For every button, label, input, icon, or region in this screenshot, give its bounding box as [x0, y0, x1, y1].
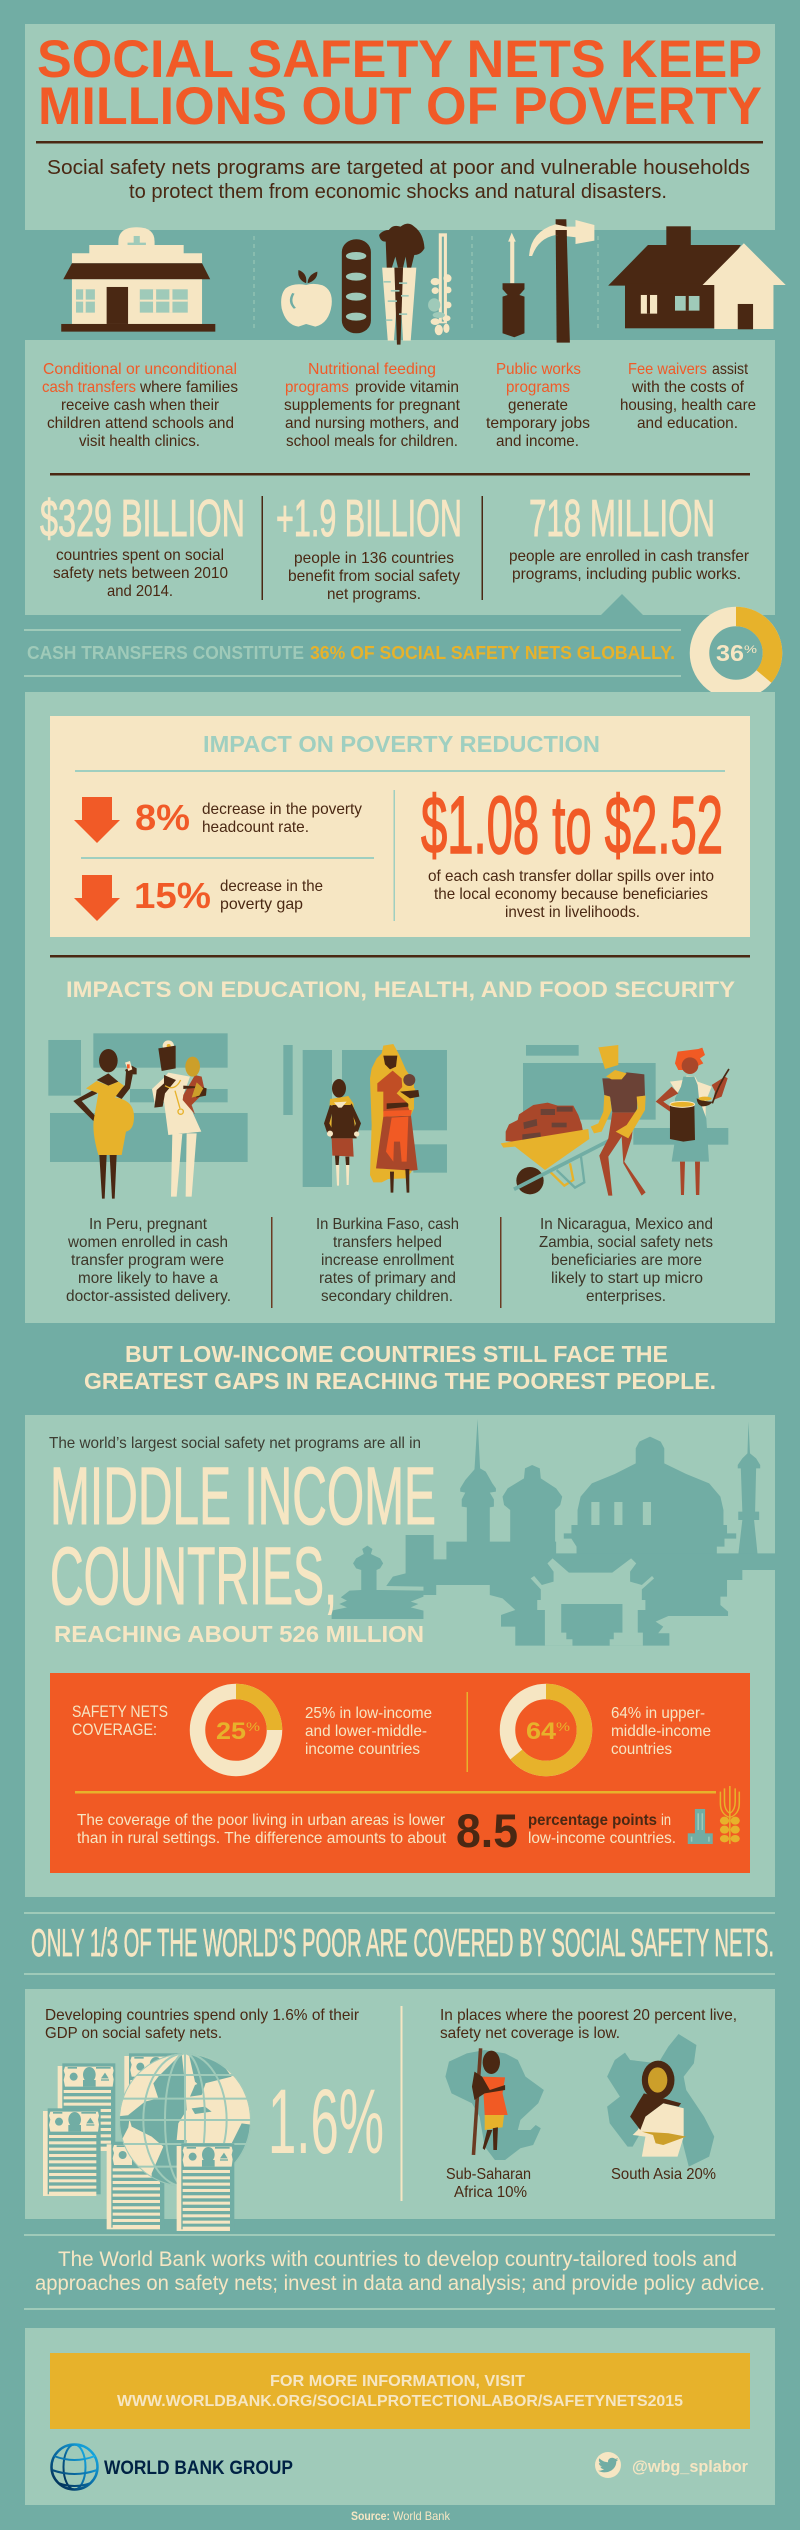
- illustration: burkina faso mother and child: [283, 1044, 447, 1193]
- headline: middle income countries: MIDDLE INCOME: [50, 1451, 436, 1542]
- illustration: wheelbarrow and cook: [501, 1045, 729, 1196]
- label: safety nets coverage: COVERAGE:: [72, 1721, 157, 1739]
- stat: spillover: the local economy because beneficiaries: [434, 886, 708, 903]
- stat: 15%: 15%: [134, 875, 211, 916]
- source: Source:: [351, 2509, 390, 2523]
- heading: greatest gaps: BUT LOW-INCOME COUNTRIES STILL FACE THE: [125, 1341, 668, 1367]
- column: cash transfers: [42, 361, 238, 450]
- caption: peru: transfer program were: [71, 1252, 224, 1269]
- column: public works: Public works: [496, 361, 581, 378]
- stats numbers: [40, 490, 715, 548]
- caption: burkina faso: increase enrollment: [321, 1252, 455, 1269]
- column: nutritional feeding: provide vitamin: [355, 379, 459, 396]
- stats captions: [53, 547, 750, 603]
- caption: nicaragua: Zambia, social safety nets: [539, 1234, 713, 1251]
- title: [37, 30, 762, 136]
- column: fee waivers: [620, 361, 756, 432]
- donut: 36%: 36: [716, 640, 744, 666]
- labels: regions: Africa 10%: [454, 2184, 527, 2201]
- stats captions: and 2014.: [107, 583, 173, 600]
- intro text: to protect them from economic shocks and natural disasters.: [129, 181, 667, 203]
- label: safety nets coverage: SAFETY NETS: [72, 1703, 168, 1721]
- illustration: globe and bills: [43, 2050, 255, 2231]
- text: poorest 20 percent: [440, 2007, 737, 2042]
- caption: peru: doctor-assisted delivery.: [66, 1288, 231, 1305]
- intro text: Social safety nets programs are targeted at poor and vulnerable households: [47, 157, 750, 179]
- column: public works: and income.: [496, 433, 579, 450]
- text: urban rural difference: in: [661, 1812, 671, 1829]
- caption: burkina faso: rates of primary and: [319, 1270, 456, 1287]
- stat: 8%: 8%: [135, 797, 190, 838]
- stats captions: people in 136 countries: [294, 550, 454, 567]
- donut: 25%: %: [246, 1720, 260, 1734]
- caption: nicaragua: [539, 1216, 713, 1305]
- callout: more information: FOR MORE INFORMATION, VISIT: [270, 2373, 525, 2390]
- statement: world bank works: The World Bank works with countries to develop country-tailored tools and: [58, 2248, 737, 2271]
- text: poorest 20 percent: safety net coverage is low.: [440, 2025, 620, 2042]
- text: urban rural difference: The coverage of the poor living in urban areas is lower: [77, 1812, 446, 1829]
- heading: greatest gaps: GREATEST GAPS IN REACHING THE POOREST PEOPLE.: [84, 1368, 716, 1394]
- caption: nicaragua: In Nicaragua, Mexico and: [540, 1216, 713, 1233]
- illustration: south asia map and woman: [607, 2034, 714, 2167]
- skyline silhouette: [332, 1419, 775, 1646]
- caption: peru: [66, 1216, 231, 1305]
- panel: middle income: [25, 1415, 775, 1897]
- column: public works: temporary jobs: [486, 415, 590, 432]
- stats captions: programs, including public works.: [512, 566, 741, 583]
- stat: 15%: decrease in the: [220, 878, 323, 895]
- stat: 15%: poverty gap: [220, 896, 303, 913]
- stats captions: people are enrolled in cash transfer: [509, 548, 750, 565]
- heading: impacts on education: IMPACTS ON EDUCATION, HEALTH, AND FOOD SECURITY: [66, 977, 735, 1002]
- column: nutritional feeding: and nursing mothers, and: [285, 415, 459, 432]
- label: safety nets coverage: [72, 1703, 168, 1739]
- cash transfers statement: CASH TRANSFERS CONSTITUTE: [27, 643, 304, 663]
- illustration: pregnant woman and doctor: [48, 1033, 248, 1199]
- caption: burkina faso: secondary children.: [321, 1288, 453, 1305]
- stats numbers: $329 BILLION: [40, 490, 245, 548]
- column: nutritional feeding: programs: [285, 379, 349, 396]
- text: 64% coverage: 64% in upper-: [611, 1705, 705, 1722]
- source: World Bank: [393, 2509, 451, 2523]
- title: SOCIAL SAFETY NETS KEEP: [37, 30, 762, 89]
- donut: 36%: [700, 616, 772, 690]
- donut: 64%: %: [556, 1720, 570, 1734]
- stat: 1.6%: 1.6%: [268, 2071, 384, 2173]
- caption: peru: In Peru, pregnant: [89, 1216, 208, 1233]
- column: nutritional feeding: Nutritional feeding: [308, 361, 436, 378]
- stats captions: net programs.: [327, 586, 421, 603]
- donut: 36%: %: [744, 644, 757, 656]
- column: cash transfers: cash transfers: [42, 379, 136, 396]
- stats captions: countries spent on social: [56, 547, 224, 564]
- stats numbers: +1.9 BILLION: [276, 490, 462, 548]
- column: nutritional feeding: supplements for pregnant: [284, 397, 461, 414]
- column: cash transfers: Conditional or unconditional: [43, 361, 237, 378]
- panel: poverty reduction box: [50, 716, 750, 937]
- text: 25% coverage: [305, 1705, 432, 1758]
- icon: health clinic: [61, 227, 215, 332]
- text: 64% coverage: countries: [611, 1741, 672, 1758]
- stat: spillover: of each cash transfer dollar spills over into: [428, 868, 714, 885]
- pointer triangle: [600, 594, 644, 616]
- text: 64% coverage: [611, 1705, 711, 1758]
- labels: regions: Sub-Saharan: [446, 2166, 531, 2183]
- donut: 64%: 64: [526, 1718, 557, 1745]
- callout: more information: WWW.WORLDBANK.ORG/SOCIALPROTECTIONLABOR/SAFETYNETS2015: [117, 2393, 683, 2410]
- column: fee waivers: Fee waivers: [628, 361, 707, 378]
- icon: city and wheat: [688, 1786, 740, 1844]
- column: nutritional feeding: [284, 361, 461, 450]
- panel: impact: [25, 692, 775, 1323]
- caption: burkina faso: [316, 1216, 459, 1305]
- caption: nicaragua: beneficiaries are more: [551, 1252, 702, 1269]
- text: spending: [45, 2007, 360, 2042]
- panel: spending: [25, 1989, 775, 2219]
- text: urban rural difference: 8.5: [456, 1804, 518, 1857]
- social: twitter handle: [595, 2452, 748, 2478]
- subhead: reaching 526 million: REACHING ABOUT 526 MILLION: [54, 1621, 424, 1647]
- heading: greatest gaps: [84, 1341, 716, 1394]
- text: urban rural difference: than in rural settings. The difference amounts to about: [77, 1830, 447, 1847]
- column: public works: programs: [506, 379, 570, 396]
- callout: more information: [50, 2353, 750, 2429]
- stat: 8%: decrease in the poverty: [202, 801, 362, 818]
- column: public works: [486, 361, 590, 450]
- caption: burkina faso: In Burkina Faso, cash: [316, 1216, 459, 1233]
- column: fee waivers: assist: [712, 361, 748, 378]
- intro text: [47, 157, 750, 203]
- statement: world bank works: approaches on safety nets; invest in data and analysis; and provide policy advice.: [35, 2272, 765, 2295]
- column: fee waivers: and education.: [637, 415, 738, 432]
- labels: regions: [446, 2166, 716, 2201]
- icon: house: [608, 226, 786, 329]
- headline: middle income countries: COUNTRIES,: [50, 1531, 337, 1622]
- title: MILLIONS OUT OF POVERTY: [38, 77, 762, 136]
- text: 64% coverage: middle-income: [611, 1723, 711, 1740]
- panel: programs text area: [25, 340, 775, 615]
- caption: peru: more likely to have a: [78, 1270, 218, 1287]
- donut: 25%: 25: [216, 1718, 246, 1745]
- panel: footer: [25, 2328, 775, 2505]
- arrow: down 8%: [74, 797, 120, 843]
- text: 25% coverage: income countries: [305, 1741, 420, 1758]
- text: urban rural difference: percentage points: [528, 1812, 657, 1829]
- stat: 15%: [134, 875, 323, 916]
- column: cash transfers: children attend schools and: [47, 415, 234, 432]
- text: 25% coverage: 25% in low-income: [305, 1705, 432, 1722]
- logo: world bank group: WORLD BANK GROUP: [104, 2458, 293, 2479]
- social: twitter handle: @wbg_splabor: [632, 2457, 748, 2476]
- cash transfers statement: [27, 643, 675, 663]
- column: fee waivers: with the costs of: [631, 379, 745, 396]
- stats captions: safety nets between 2010: [53, 565, 228, 582]
- panel: header: [25, 24, 775, 230]
- caption: burkina faso: transfers helped: [333, 1234, 442, 1251]
- heading: impact on poverty reduction: IMPACT ON POVERTY REDUCTION: [203, 731, 600, 757]
- programs text: [42, 361, 756, 450]
- icon: food: [281, 224, 452, 345]
- column: public works: generate: [508, 397, 568, 414]
- donut: 64%: [508, 1692, 584, 1768]
- caption: peru: women enrolled in cash: [67, 1234, 228, 1251]
- stats captions: benefit from social safety: [288, 568, 460, 585]
- stat: spillover: [421, 780, 723, 921]
- column: cash transfers: receive cash when their: [61, 397, 220, 414]
- text: spending: GDP on social safety nets.: [45, 2025, 222, 2042]
- column: nutritional feeding: school meals for children.: [286, 433, 458, 450]
- stat: 8%: [135, 797, 362, 838]
- donut: 25%: [198, 1692, 274, 1768]
- text: urban rural difference: low-income countries.: [528, 1830, 676, 1847]
- panel: coverage: [50, 1673, 750, 1873]
- column: cash transfers: visit health clinics.: [79, 433, 200, 450]
- intro: largest programs: The world’s largest social safety net programs are all in: [49, 1435, 421, 1452]
- text: urban rural difference: [77, 1804, 676, 1857]
- text: 25% coverage: and lower-middle-: [305, 1723, 427, 1740]
- caption: nicaragua: enterprises.: [586, 1288, 666, 1305]
- stat: 8%: headcount rate.: [202, 819, 309, 836]
- illustration: africa map and man: [445, 2048, 544, 2160]
- captions: impacts: [66, 1216, 713, 1305]
- arrow: down 15%: [74, 875, 120, 921]
- headline: middle income countries: [50, 1451, 436, 1622]
- column: cash transfers: where families: [139, 379, 238, 396]
- cash transfers statement: 36% OF SOCIAL SAFETY NETS GLOBALLY.: [310, 643, 675, 663]
- column: fee waivers: housing, health care: [620, 397, 756, 414]
- logo: world bank group: [52, 2444, 293, 2490]
- statement: world bank works: [35, 2248, 765, 2295]
- stat: spillover: invest in livelihoods.: [505, 904, 640, 921]
- text: poorest 20 percent: In places where the poorest 20 percent live,: [440, 2007, 737, 2024]
- labels: regions: South Asia 20%: [611, 2166, 716, 2183]
- text: spending: Developing countries spend only 1.6% of their: [45, 2007, 360, 2024]
- caption: nicaragua: likely to start up micro: [551, 1270, 703, 1287]
- source: [351, 2509, 451, 2523]
- icon: tools: [503, 219, 594, 343]
